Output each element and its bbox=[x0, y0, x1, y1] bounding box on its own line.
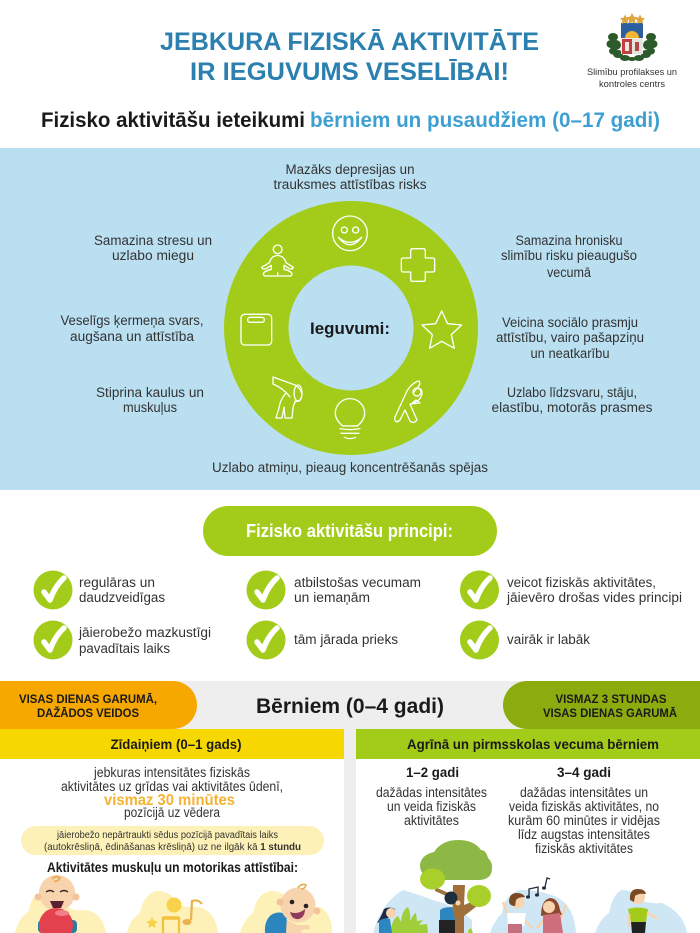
section heading: Bērniem (0–4 gadi) bbox=[256, 695, 444, 718]
benefit: memory: Uzlabo atmiņu, pieaug koncentrēšanās spējas bbox=[212, 460, 488, 475]
principles heading pill bbox=[203, 506, 497, 556]
check item: safety: jāievēro drošas vides principi bbox=[506, 590, 682, 605]
infants recommendation: vismaz 30 minūtes bbox=[104, 792, 235, 809]
icon: light bulb bbox=[335, 399, 365, 439]
check item: limit sedentary: jāierobežo mazkustīgi bbox=[78, 625, 211, 640]
toddlers header: Agrīnā un pirmsskolas vecuma bērniem bbox=[407, 736, 659, 752]
logo: coat of arms and organisation name bbox=[587, 13, 677, 90]
benefit: bones: muskuļus bbox=[123, 400, 177, 415]
benefit: chronic disease: Samazina hronisku bbox=[516, 233, 622, 248]
infants recommendation bbox=[61, 765, 283, 820]
age column: 3-4 years: dažādas intensitātes un bbox=[520, 785, 648, 800]
orange pill: VISAS DIENAS GARUMĀ, bbox=[19, 692, 157, 706]
age column: 3-4 years: kurām 60 minūtes ir vidējas bbox=[508, 813, 660, 828]
benefit: balance bbox=[492, 385, 653, 415]
benefit: weight: Veselīgs ķermeņa svars, bbox=[60, 313, 204, 328]
benefit: stress bbox=[94, 233, 212, 263]
logo: coat of arms and organisation name: kontroles centrs bbox=[599, 79, 665, 90]
benefit: mood: trauksmes attīstības risks bbox=[274, 177, 427, 192]
age column: 1-2 years: 1–2 gadi bbox=[406, 765, 459, 780]
illustration: music and toys bbox=[127, 891, 218, 933]
benefit: bones bbox=[96, 385, 204, 415]
principle checks bbox=[34, 570, 682, 660]
icon: bathroom scale bbox=[241, 314, 272, 345]
illustration: crawling baby bbox=[240, 884, 332, 933]
benefit: bones: Stiprina kaulus un bbox=[96, 385, 204, 400]
green pill bbox=[503, 681, 700, 729]
age column: 1-2 years: aktivitātes bbox=[404, 813, 459, 828]
illustration: dancing children bbox=[490, 878, 576, 933]
benefit icons bbox=[241, 216, 462, 439]
age column: 3-4 years: līdz augstas intensitātes bbox=[518, 827, 650, 842]
section band: children 0-4 bbox=[0, 681, 700, 933]
age column: 3-4 years: veida fiziskās aktivitātes, no bbox=[509, 799, 659, 814]
sitting limit callout: jāierobežo nepārtraukti sēdus pozīcijā pavadītais laiks bbox=[56, 830, 278, 841]
check item: age-appropriate: atbilstošas vecumam bbox=[294, 575, 421, 590]
benefit: mood bbox=[274, 162, 427, 192]
infants recommendation: aktivitātes uz grīdas vai aktivitātes ūdenī, bbox=[61, 779, 283, 794]
check item: safety bbox=[460, 570, 682, 610]
sitting limit callout: (autokrēsliņā, ēdināšanas krēsliņā) uz ne ilgāk kā 1 stundu bbox=[44, 842, 301, 853]
green pill: VISMAZ 3 STUNDAS bbox=[556, 692, 666, 706]
orange pill: DAŽĀDOS VEIDOS bbox=[37, 705, 139, 720]
age column: 3-4 years: fiziskās aktivitātes bbox=[535, 841, 633, 856]
check item: more is better bbox=[460, 620, 590, 660]
main title: IR IEGUVUMS VESELĪBAI! bbox=[190, 58, 509, 86]
toddlers header bbox=[356, 729, 700, 759]
ring centre label: Ieguvumi: bbox=[310, 319, 390, 338]
benefit: social skills: un neatkarību bbox=[530, 346, 610, 361]
subtitle bbox=[41, 109, 660, 132]
principles heading pill: Fizisko aktivitāšu principi: bbox=[246, 521, 453, 541]
check item: limit sedentary bbox=[34, 620, 211, 660]
activities heading: Aktivitātes muskuļu un motorikas attīstībai: bbox=[47, 860, 298, 875]
icon: knee joint bbox=[273, 377, 302, 418]
panel: toddlers and preschoolers bbox=[356, 729, 700, 933]
logo: coat of arms and organisation name: Slimību profilakses un bbox=[587, 67, 677, 78]
check item: age-appropriate: un iemaņām bbox=[294, 590, 370, 605]
age column: 1-2 years bbox=[376, 765, 487, 828]
illustration: running child bbox=[595, 889, 687, 933]
infants recommendation: jebkuras intensitātes fiziskās bbox=[93, 765, 250, 780]
age column: 1-2 years: un veida fiziskās bbox=[387, 799, 476, 814]
benefit: chronic disease: slimību risku pieaugušo bbox=[501, 248, 637, 263]
icon: meditating person bbox=[262, 245, 293, 276]
panel: benefits bbox=[0, 148, 700, 490]
benefit: weight: augšana un attīstība bbox=[70, 329, 194, 344]
benefit: social skills bbox=[496, 315, 644, 361]
benefit: mood: Mazāks depresijas un bbox=[286, 162, 414, 177]
benefit: chronic disease bbox=[501, 233, 637, 280]
check item: joy: tām jārada prieks bbox=[294, 632, 398, 647]
panel: infants bbox=[0, 729, 344, 933]
check item: regular bbox=[34, 570, 165, 610]
check item: safety: veicot fiziskās aktivitātes, bbox=[507, 575, 656, 590]
benefit: chronic disease: vecumā bbox=[547, 265, 591, 280]
icon: medical cross bbox=[401, 249, 435, 281]
benefit: social skills: Veicina sociālo prasmju bbox=[502, 315, 638, 330]
icon: smiley bbox=[333, 216, 367, 251]
check item: limit sedentary: pavadītais laiks bbox=[79, 641, 170, 656]
green pill: VISAS DIENAS GARUMĀ bbox=[543, 706, 677, 720]
benefit: social skills: attīstību, vairo pašapziņu bbox=[496, 330, 644, 345]
illustration: baby with ball bbox=[15, 875, 106, 933]
age column: 1-2 years: dažādas intensitātes bbox=[376, 785, 487, 800]
main title: JEBKURA FIZISKĀ AKTIVITĀTE bbox=[160, 28, 539, 56]
infants recommendation: pozīcijā uz vēdera bbox=[124, 805, 220, 820]
infants header: Zīdaiņiem (0–1 gads) bbox=[110, 736, 242, 752]
benefit: stress: uzlabo miegu bbox=[112, 248, 194, 263]
check item: joy bbox=[246, 620, 398, 660]
benefit: stress: Samazina stresu un bbox=[94, 233, 212, 248]
benefit: weight bbox=[60, 313, 204, 344]
infants header bbox=[0, 729, 344, 759]
subtitle: bērniem un pusaudžiem (0–17 gadi) bbox=[310, 109, 660, 132]
subtitle: Fizisko aktivitāšu ieteikumi bbox=[41, 109, 305, 132]
illustration: children by a tree bbox=[373, 840, 492, 933]
check item: more is better: vairāk ir labāk bbox=[507, 632, 590, 647]
age column: 3-4 years: 3–4 gadi bbox=[557, 765, 611, 780]
sitting limit callout bbox=[21, 826, 324, 855]
benefit: balance: elastību, motorās prasmes bbox=[492, 400, 653, 415]
benefit: balance: Uzlabo līdzsvaru, stāju, bbox=[507, 385, 637, 400]
orange pill bbox=[0, 681, 197, 729]
benefit ring bbox=[224, 201, 478, 455]
main title bbox=[160, 28, 539, 86]
age column: 3-4 years bbox=[508, 765, 660, 856]
check item: age-appropriate bbox=[246, 570, 421, 610]
check item: regular: daudzveidīgas bbox=[79, 590, 165, 605]
check item: regular: regulāras un bbox=[79, 575, 155, 590]
icon: stretching figure bbox=[395, 381, 422, 422]
icon: star bbox=[422, 311, 462, 348]
